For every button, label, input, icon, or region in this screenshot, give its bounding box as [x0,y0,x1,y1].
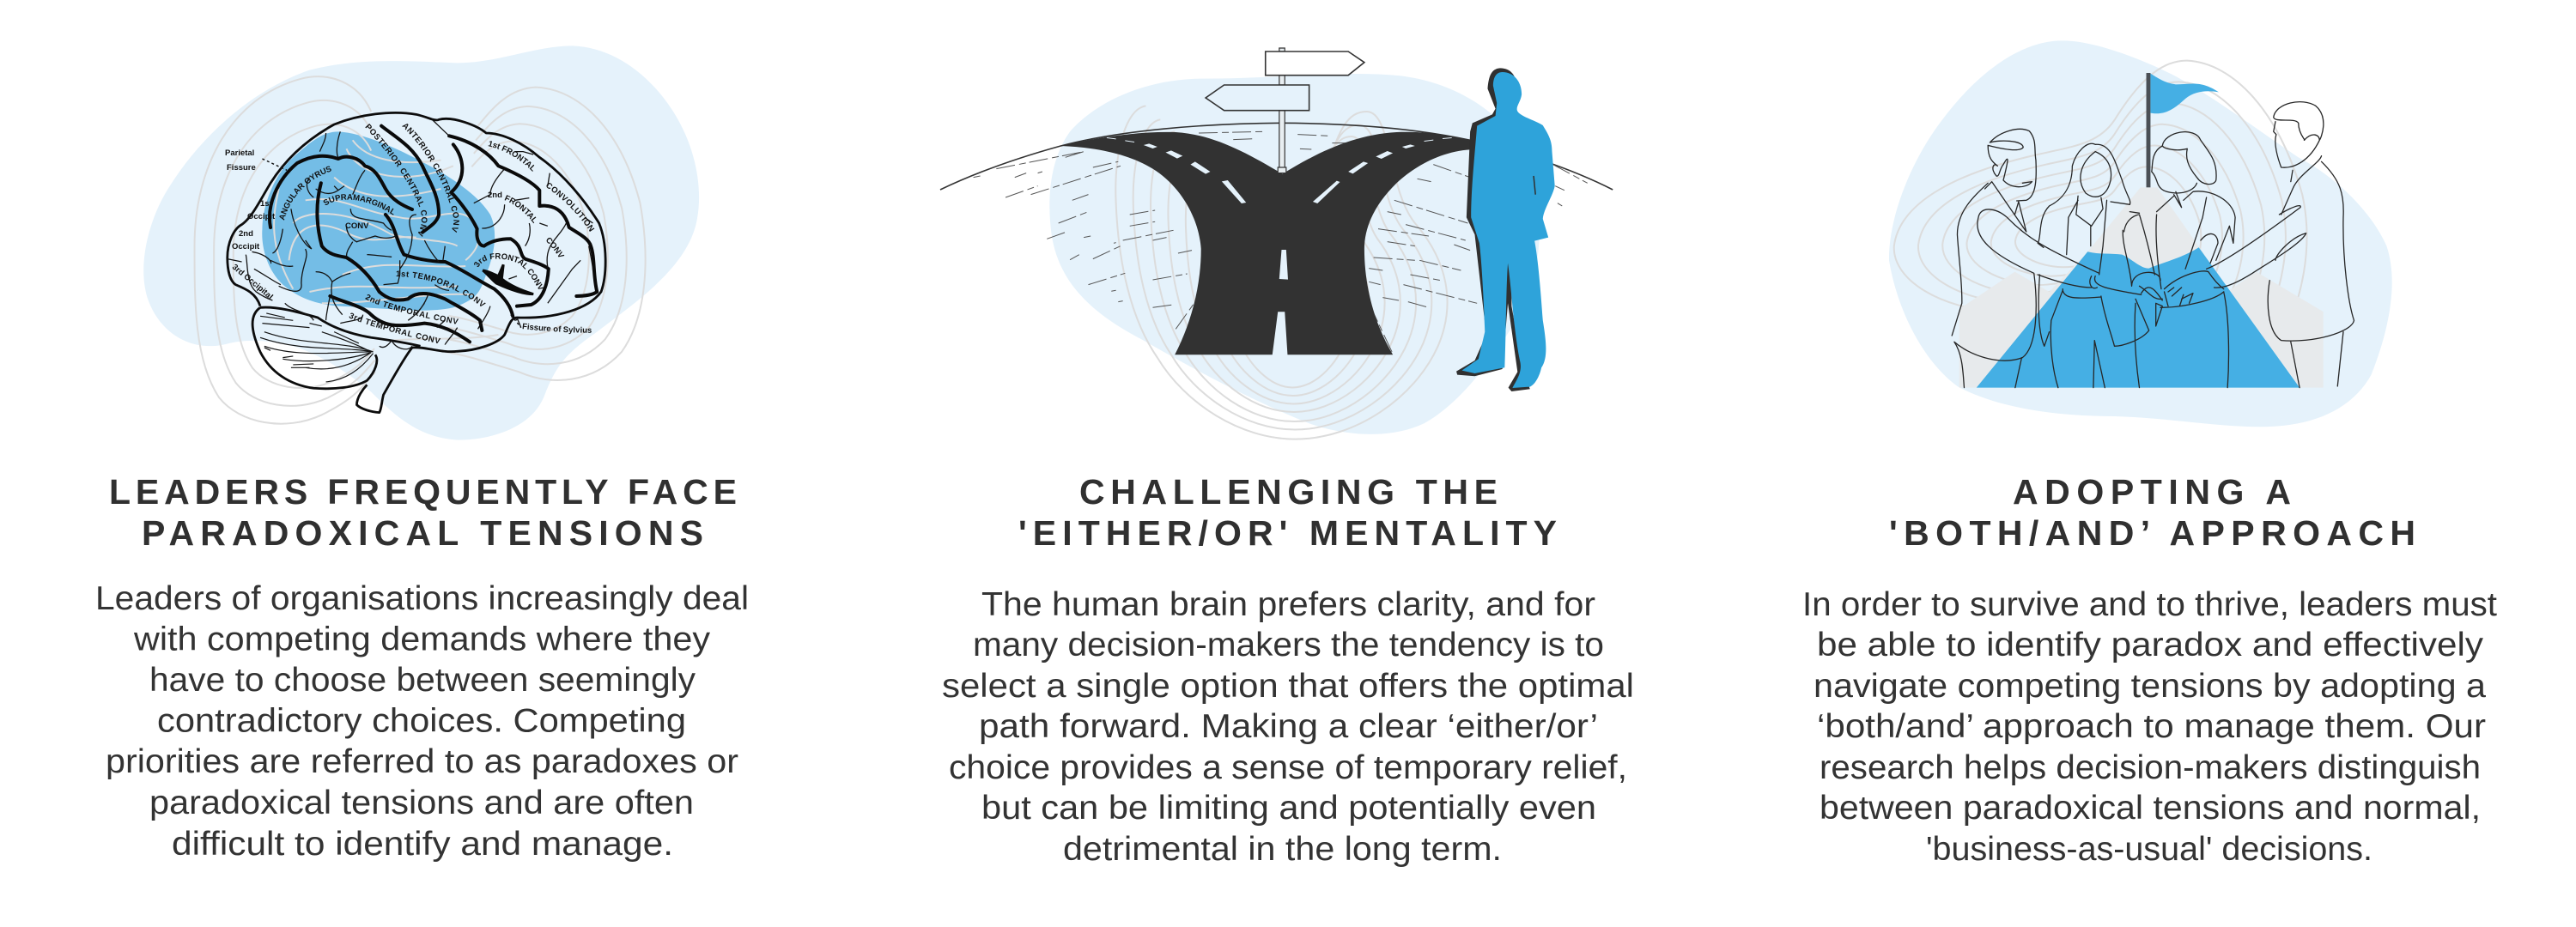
heading: challenging the either/or mentality: CHALLENGING THE [1079,472,1498,512]
body text: both/and: 'business-as-usual' decisions. [1926,831,2372,868]
body text: leaders: paradoxical tensions and are often [149,785,694,821]
brain labels: 2nd [239,229,253,239]
pale blue blob [1889,40,2392,427]
brain labels: Occipit [232,242,260,251]
brain labels: 1st TEMPORAL CONV [397,271,486,306]
signpost [1206,48,1364,173]
heading: leaders frequently face: LEADERS FREQUENTLY FACE [109,472,737,512]
flag and pole [2147,73,2219,187]
brain labels: 3rd Occipital [232,264,273,299]
contour lines [1115,106,1448,439]
body text: either/or: select a single option that offers the optimal [942,668,1634,705]
body text: either/or: many decision-makers the tendency is to [973,627,1604,663]
grey mountains [1959,187,2324,388]
body text: either/or: but can be limiting and potentially even [981,790,1596,827]
team of four, line drawing [1952,102,2354,388]
brain labels: 3rd FRONTAL CONV [474,253,544,289]
body text: both/and: between paradoxical tensions and normal, [1820,790,2481,827]
brain outline [228,112,605,413]
dashed pointer lines [262,159,521,328]
brain labels: Parietal [225,148,254,158]
heading: leaders frequently face [109,472,737,553]
body text: both/and: In order to survive and to thrive, leaders must [1802,586,2497,623]
illustration: team, mountain and flag [1889,40,2392,427]
pale blue blob [1049,74,1540,434]
heading: challenging the either/or mentality: 'EITHER/OR' MENTALITY [1018,513,1557,553]
brain labels: 3rd TEMPORAL CONV [349,312,441,343]
person three [2123,132,2235,388]
body text: either/or: choice provides a sense of temporary relief, [949,749,1627,786]
body text: either/or [942,586,1634,868]
blue brain highlight [262,131,495,311]
road markings [1107,137,1452,280]
body text: leaders: priorities are referred to as paradoxes or [106,743,738,780]
body text: leaders: Leaders of organisations increasingly deal [95,580,749,617]
body text: either/or: detrimental in the long term. [1063,831,1502,868]
horizon line [940,123,1613,190]
brain labels: 1st FRONTAL [488,141,534,172]
brain labels: CONV [546,237,565,258]
body text: both/and: navigate competing tensions by adopting a [1814,668,2486,705]
body text: both/and: be able to identify paradox and effectively [1817,627,2484,663]
body text: leaders: difficult to identify and manage. [172,826,673,863]
person one [1952,129,2099,388]
body text: leaders: have to choose between seemingly [149,662,696,699]
contour lines [1894,61,2306,344]
body text: leaders: with competing demands where they [133,621,711,657]
brain labels: ANGULAR GYRUS [279,167,331,221]
panel: adopting both/and approach [1802,40,2497,868]
heading: adopting both/and approach: ADOPTING A [2013,472,2291,512]
brain labels: SUPRAMARGINAL [323,194,394,215]
heading: adopting both/and approach [1889,472,2415,553]
brain labels: Fissure of Sylvius [522,323,592,335]
panel: leaders face paradoxical tensions [95,46,749,863]
blue mountain [1977,247,2300,388]
brain labels: 2nd [488,191,502,200]
brain labels: Fissure [227,163,256,173]
body text: both/and: ‘both/and’ approach to manage them. Our [1817,708,2486,745]
heading: adopting both/and approach: 'BOTH/AND’ APPROACH [1889,513,2415,553]
hatching [974,131,1588,352]
brain labels: FRONTAL [505,195,536,223]
body text: both/and: research helps decision-makers distinguish [1820,749,2481,786]
brain labels [225,124,594,343]
brain thin sulci [228,120,592,349]
contour lines [195,76,646,424]
body text: either/or: path forward. Making a clear ‘either/or’ [979,708,1598,745]
body text: leaders: contradictory choices. Competing [157,702,686,740]
body text: either/or: The human brain prefers clarity, and for [981,586,1595,623]
body text: leaders [95,580,749,863]
brain labels: Occipit [247,212,276,221]
person two [2038,143,2149,388]
panel: challenging either/or mentality [940,48,1634,868]
silhouette: person [1456,68,1555,391]
brain labels: 2nd TEMPORAL CONV [365,294,459,324]
brain thick sulci [270,126,597,342]
brain labels: CONVOLUTION [546,183,594,232]
heading: challenging the either/or mentality [1018,472,1557,553]
road [1060,132,1474,354]
illustration: brain on blue blobs [143,46,699,439]
illustration: forked road, signpost and silhouette [940,48,1613,439]
brain labels: CONV [345,221,369,231]
brain labels: ANTERIOR CENTRAL CONV [402,124,459,233]
person four [2207,102,2354,388]
stacked hands [2139,271,2224,307]
body text: both/and [1802,586,2497,868]
brain labels: 1st [260,199,273,209]
cerebellum lines [260,313,374,382]
heading: leaders frequently face: PARADOXICAL TENSIONS [142,513,703,553]
brain labels: POSTERIOR CENTRAL CONV [365,124,428,237]
sylvian fissure branch [483,264,533,294]
pale blue blob [143,45,699,440]
